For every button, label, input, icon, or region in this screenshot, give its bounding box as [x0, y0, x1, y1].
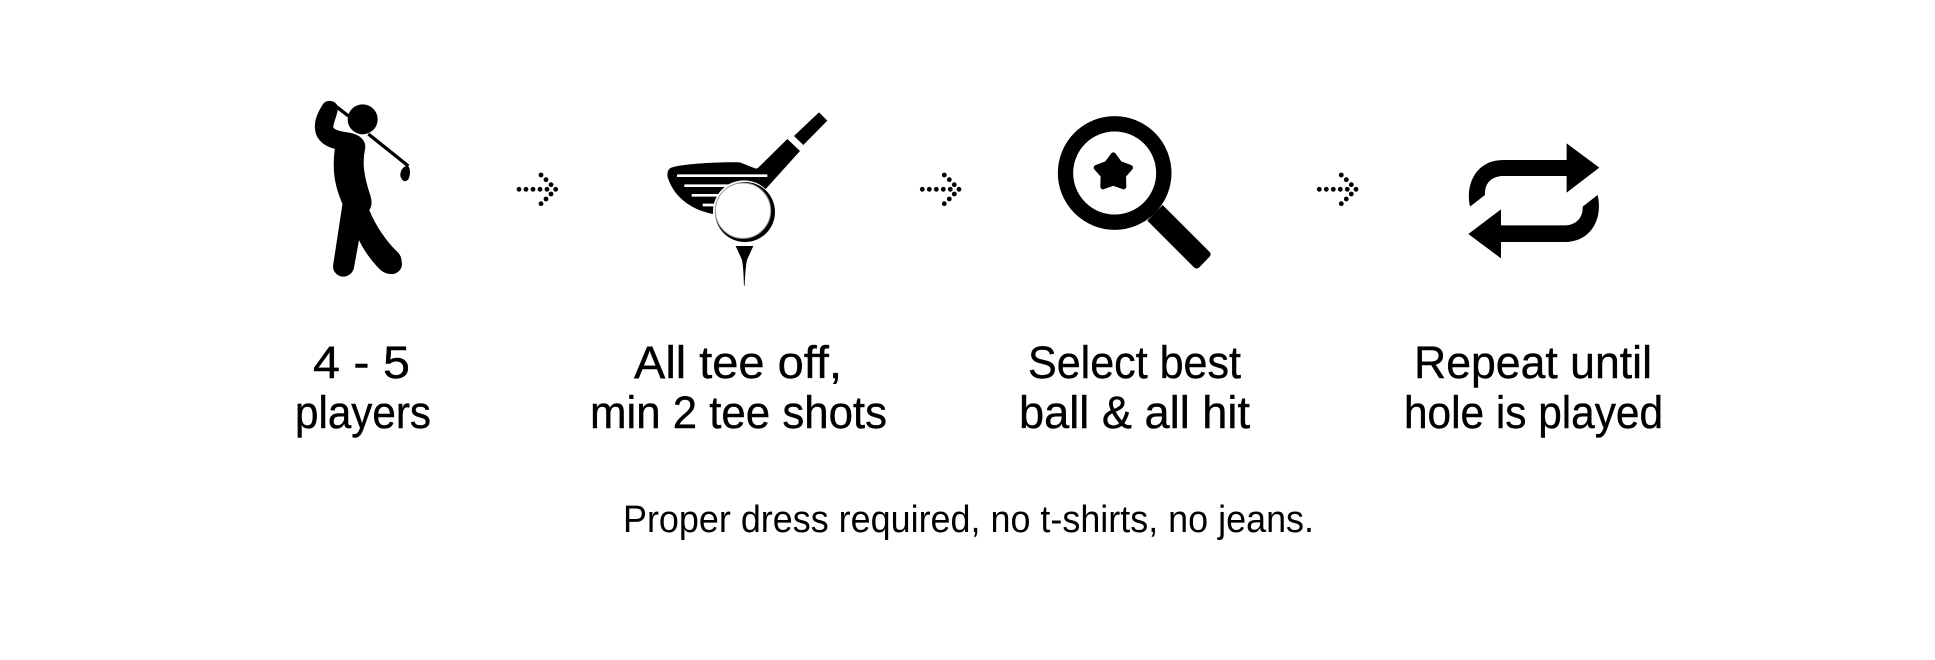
- icon: magnifying glass with star: [1065, 124, 1211, 269]
- label: 4 - 5 players: players: [295, 387, 431, 438]
- label: 4 - 5 players: [295, 337, 431, 438]
- footer note: Proper dress required, no t-shirts, no jeans.: [623, 499, 1314, 541]
- label: 4 - 5 players: 4 - 5: [313, 337, 410, 388]
- arrow: step 1 to step 2: [517, 173, 558, 206]
- label: repeat until hole is played: [1404, 337, 1663, 438]
- label: all tee off: min 2 tee shots: [590, 387, 887, 438]
- arrow: step 3 to step 4: [1317, 173, 1358, 206]
- icon: repeat arrows: [1468, 143, 1599, 258]
- label: repeat until hole is played: hole is played: [1404, 387, 1663, 438]
- label: select best ball: ball & all hit: [1019, 387, 1250, 438]
- label: select best ball: [1019, 337, 1250, 438]
- label: select best ball: Select best: [1028, 337, 1241, 388]
- arrow: step 2 to step 3: [920, 173, 961, 206]
- label: repeat until hole is played: Repeat until: [1414, 337, 1652, 388]
- label: all tee off: All tee off,: [634, 337, 842, 388]
- icon: golf club and ball on tee: [667, 112, 827, 286]
- label: all tee off: [590, 337, 887, 438]
- icon: golfer: [316, 102, 410, 277]
